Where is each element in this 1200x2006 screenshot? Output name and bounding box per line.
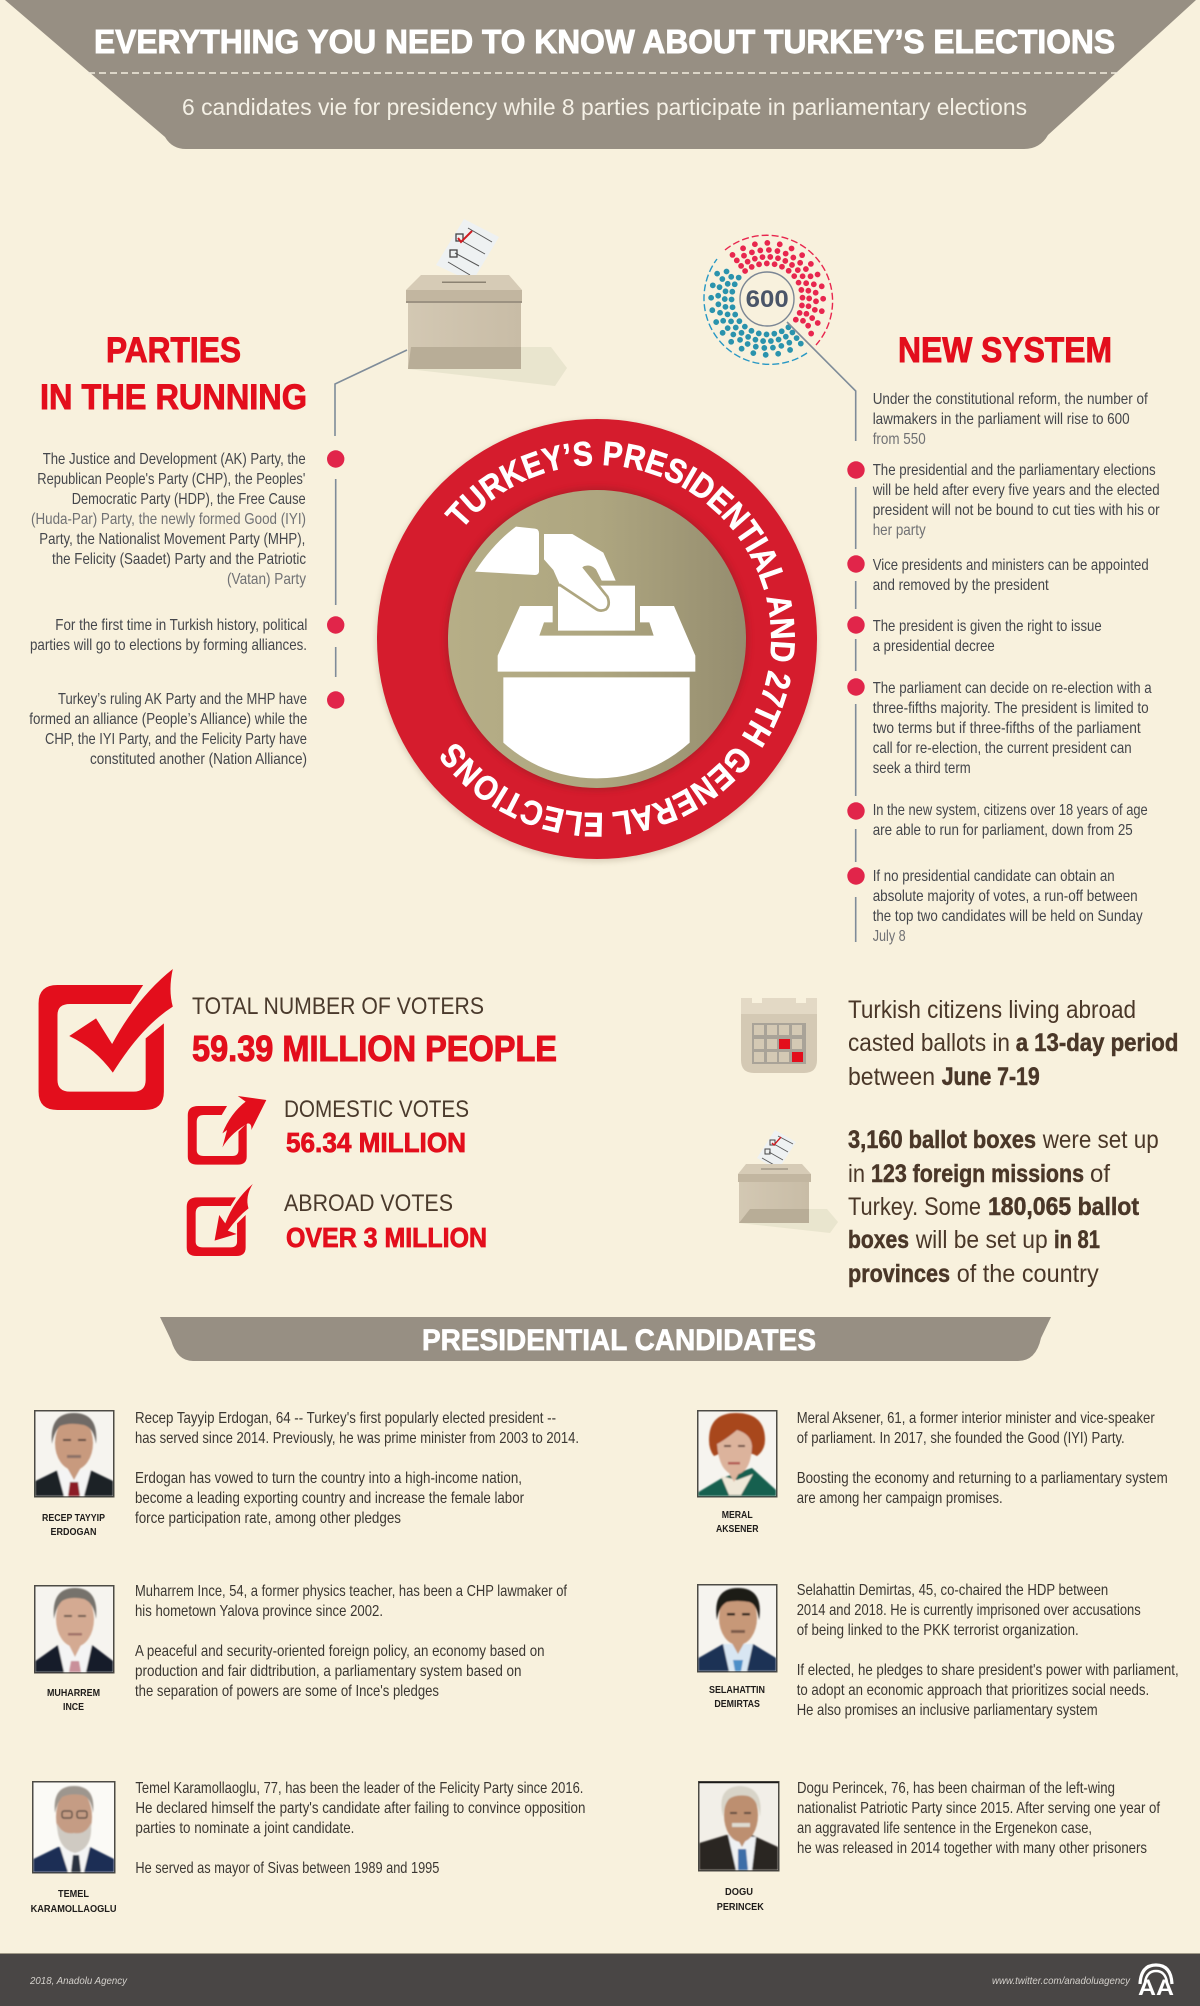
name: Demirtas: SELAHATTIN xyxy=(709,1684,765,1696)
text: Ince bio xyxy=(135,1583,567,1700)
text: run-off: July 8 xyxy=(873,928,906,945)
text: elections every five years: her party xyxy=(873,522,926,539)
portrait: Karamollaoglu xyxy=(33,1782,115,1873)
name: Erdogan: RECEP TAYYIP xyxy=(42,1512,105,1524)
number: abroad votes: OVER 3 MILLION xyxy=(286,1222,487,1253)
heading: parties: PARTIES xyxy=(106,331,241,370)
candidate: Ince xyxy=(35,1583,567,1713)
ring text: TURKEY’S PRESIDENTIAL AND 27TH GENERAL ELECTIONS xyxy=(440,441,795,837)
text: lawmakers xyxy=(873,391,1148,448)
text: Perincek bio: an aggravated life sentence in the Ergenekon case, xyxy=(797,1820,1092,1837)
name: Karamollaoglu xyxy=(31,1888,117,1915)
text: Ince bio: A peaceful and security-oriented foreign policy, an economy based on xyxy=(135,1643,544,1660)
text: ballot box counts: in 81 xyxy=(1054,1226,1100,1254)
icon: calendar xyxy=(741,998,817,1073)
text: ballot box counts: provinces xyxy=(848,1260,950,1288)
text: party list: Democratic Party (HDP), the Free Cause xyxy=(72,491,306,508)
label: total voters: TOTAL NUMBER OF VOTERS xyxy=(192,993,484,1020)
text: lawmakers: from 550 xyxy=(873,431,926,448)
text: party list: (Huda-Par) Party, the newly formed Good (IYI) xyxy=(31,511,306,528)
footer url: www.twitter.com/anadoluagency xyxy=(992,1975,1131,1987)
panel: abroad voting period xyxy=(738,996,1178,1288)
text: Perincek bio: Dogu Perincek, 76, has been chairman of the left-wing xyxy=(797,1780,1115,1797)
text: Erdogan bio: has served since 2014. Previously, he was prime minister from 2003 to 2014. xyxy=(135,1430,579,1447)
text: age limit: In the new system, citizens over 18 years of age xyxy=(873,802,1148,819)
text: vice presidents: and removed by the president xyxy=(873,577,1049,594)
number: total voters: 59.39 MILLION PEOPLE xyxy=(192,1028,557,1069)
label: abroad votes: ABROAD VOTES xyxy=(284,1190,453,1217)
text: age limit: are able to run for parliament, down from 25 xyxy=(873,822,1133,839)
text: Aksener bio xyxy=(797,1410,1168,1507)
candidate: Erdogan xyxy=(35,1410,579,1538)
icon: AA logo: AA xyxy=(1138,1975,1174,2000)
text: ballot box counts xyxy=(848,1126,1159,1288)
portrait: Erdogan xyxy=(35,1411,114,1497)
name: Demirtas xyxy=(709,1684,765,1710)
section banner: presidential candidates xyxy=(160,1317,1051,1361)
text: 13-day period: between xyxy=(848,1063,935,1091)
panel: new system xyxy=(787,322,1160,945)
text: ballot box counts: 180,065 ballot xyxy=(988,1193,1140,1221)
text: run-off: absolute majority of votes, a run-off between xyxy=(873,888,1138,905)
text: age limit xyxy=(873,802,1148,839)
text: re-election: three-fifths majority. The president is limited to xyxy=(873,700,1149,717)
text: Ince bio: production and fair didtribution, a parliamentary system based on xyxy=(135,1663,522,1680)
text: alliances first xyxy=(30,617,307,654)
name: Perincek: PERINCEK xyxy=(717,1901,764,1913)
icon: large checkbox xyxy=(39,969,173,1110)
text: Demirtas bio: Selahattin Demirtas, 45, co-chaired the HDP between xyxy=(797,1582,1108,1599)
text: ballot box counts: 123 foreign missions xyxy=(871,1160,1084,1188)
text: 13-day period xyxy=(848,996,1178,1091)
text: run-off xyxy=(873,868,1143,945)
portrait: Perincek xyxy=(699,1782,779,1871)
candidate: Karamollaoglu xyxy=(31,1780,585,1915)
text: re-election: call for re-election, the current president can xyxy=(873,740,1132,757)
text: Karamollaoglu bio: parties to nominate a joint candidate. xyxy=(135,1820,354,1837)
candidate: Aksener xyxy=(698,1410,1168,1535)
timeline connector xyxy=(787,322,865,942)
panel: parties in the running xyxy=(29,331,407,768)
text: ballot box counts: in xyxy=(848,1160,865,1188)
text: Ince bio: the separation of powers are some of Ince's pledges xyxy=(135,1683,439,1700)
candidate: Perincek xyxy=(699,1780,1160,1913)
text: Demirtas bio: of being linked to the PKK terrorist organization. xyxy=(797,1622,1079,1639)
text: Karamollaoglu bio: He served as mayor of Sivas between 1989 and 1995 xyxy=(135,1860,439,1877)
heading: in the running: IN THE RUNNING xyxy=(40,378,307,417)
name: Karamollaoglu: TEMEL xyxy=(58,1888,89,1900)
panel: voter statistics xyxy=(39,969,557,1256)
subtitle: 6 candidates vie for presidency while 8 parties participate in parliamentary elections xyxy=(182,94,1027,120)
text: alliance members xyxy=(29,691,307,768)
text: lawmakers: lawmakers in the parliament will rise to 600 xyxy=(873,411,1130,428)
icon: small ballot box xyxy=(738,1130,838,1233)
central emblem xyxy=(374,418,820,864)
name: Karamollaoglu: KARAMOLLAOGLU xyxy=(31,1903,117,1915)
text: ballot box counts: boxes xyxy=(848,1226,909,1254)
text: Ince bio: his hometown Yalova province since 2002. xyxy=(135,1603,383,1620)
name: Demirtas: DEMIRTAS xyxy=(714,1698,760,1710)
text: Ince bio: Muharrem Ince, 54, a former physics teacher, has been a CHP lawmaker of xyxy=(135,1583,567,1600)
name: Ince xyxy=(47,1687,100,1713)
text: Demirtas bio xyxy=(797,1582,1179,1719)
text: Demirtas bio: He also promises an inclusive parliamentary system xyxy=(797,1702,1098,1719)
text: Perincek bio xyxy=(797,1780,1160,1857)
icon: hand casting ballot xyxy=(475,527,695,778)
text: ballot box counts: Turkey. Some xyxy=(848,1193,981,1221)
heading: new system: NEW SYSTEM xyxy=(898,331,1112,370)
title: EVERYTHING YOU NEED TO KNOW ABOUT TURKEY’S ELECTIONS xyxy=(94,23,1115,60)
text: alliance members: Turkey’s ruling AK Party and the MHP have xyxy=(58,691,307,708)
name: Aksener: MERAL xyxy=(722,1509,753,1521)
text: run-off: If no presidential candidate can obtain an xyxy=(873,868,1115,885)
text: 13-day period: a 13-day period xyxy=(1016,1029,1178,1057)
text: ballot box counts: will be set up xyxy=(915,1226,1048,1254)
icon: AA logo xyxy=(1138,1965,1174,2000)
text: decree: a presidential decree xyxy=(873,638,995,655)
text: elections every five years xyxy=(872,462,1160,539)
footer xyxy=(0,1953,1200,2006)
text: re-election: The parliament can decide on re-election with a xyxy=(873,680,1152,697)
footer credit: 2018, Anadolu Agency xyxy=(29,1975,128,1987)
text: Aksener bio: of parliament. In 2017, she founded the Good (IYI) Party. xyxy=(797,1430,1125,1447)
label: domestic votes: DOMESTIC VOTES xyxy=(284,1096,469,1123)
name: Erdogan: ERDOGAN xyxy=(50,1526,96,1538)
candidate: Demirtas xyxy=(698,1582,1179,1719)
text: ballot box counts: were set up xyxy=(1042,1126,1159,1154)
text: party list: Party, the Nationalist Movement Party (MHP), xyxy=(39,531,305,548)
text: decree xyxy=(873,618,1102,655)
header banner xyxy=(5,0,1196,149)
text: vice presidents xyxy=(873,557,1149,594)
text: party list: the Felicity (Saadet) Party and the Patriotic xyxy=(52,551,306,568)
icon: ballot box xyxy=(406,219,567,386)
text: Aksener bio: are among her campaign promises. xyxy=(797,1490,1003,1507)
text: 13-day period: Turkish citizens living abroad xyxy=(848,996,1136,1024)
text: elections every five years: president will not be bound to cut ties with his or xyxy=(873,502,1160,519)
text: re-election xyxy=(873,680,1152,777)
text: ballot box counts: of xyxy=(1090,1160,1110,1188)
text: party list: The Justice and Development (AK) Party, the xyxy=(43,451,306,468)
name: Perincek xyxy=(717,1886,764,1913)
text: Erdogan bio xyxy=(135,1410,579,1527)
text: alliances first: parties will go to elections by forming alliances. xyxy=(30,637,307,654)
text: party list: (Vatan) Party xyxy=(227,571,306,588)
portrait: Ince xyxy=(35,1586,114,1673)
number: domestic votes: 56.34 MILLION xyxy=(286,1127,466,1158)
icon: domestic checkbox arrow xyxy=(188,1096,266,1165)
text: Erdogan bio: Recep Tayyip Erdogan, 64 -- Turkey's first popularly elected president -- xyxy=(135,1410,556,1427)
text: re-election: seek a third term xyxy=(873,760,971,777)
timeline connector xyxy=(327,350,407,709)
text: Karamollaoglu bio: He declared himself the party's candidate after failing to convince opposition xyxy=(135,1800,585,1817)
icon: parliament seats 600: 600 xyxy=(746,286,789,313)
portrait: Demirtas xyxy=(698,1585,777,1672)
text: run-off: the top two candidates will be held on Sunday xyxy=(873,908,1143,925)
name: Erdogan xyxy=(42,1512,105,1538)
icon: parliament seats 600 xyxy=(704,235,833,364)
section banner: presidential candidates: PRESIDENTIAL CANDIDATES xyxy=(422,1324,816,1357)
text: decree: The president is given the right to issue xyxy=(873,618,1102,635)
text: alliance members: constituted another (Nation Alliance) xyxy=(90,751,307,768)
text: vice presidents: Vice presidents and ministers can be appointed xyxy=(873,557,1149,574)
text: 13-day period: June 7-19 xyxy=(942,1063,1040,1091)
text: Erdogan bio: force participation rate, among other pledges xyxy=(135,1510,401,1527)
text: elections every five years: The presidential and the parliamentary elections xyxy=(873,462,1156,479)
name: Ince: INCE xyxy=(63,1701,84,1713)
text: ballot box counts: of the country xyxy=(957,1260,1099,1288)
text: alliances first: For the first time in Turkish history, political xyxy=(55,617,307,634)
text: party list xyxy=(31,451,306,588)
text: Karamollaoglu bio: Temel Karamollaoglu, 77, has been the leader of the Felicity Party since 2016. xyxy=(135,1780,583,1797)
name: Aksener xyxy=(716,1509,759,1535)
text: party list: Republican People's Party (CHP), the Peoples' xyxy=(37,471,305,488)
text: Erdogan bio: Erdogan has vowed to turn the country into a high-income nation, xyxy=(135,1470,522,1487)
text: alliance members: CHP, the IYI Party, and the Felicity Party have xyxy=(45,731,307,748)
text: alliance members: formed an alliance (People’s Alliance) while the xyxy=(29,711,307,728)
text: lawmakers: Under the constitutional reform, the number of xyxy=(873,391,1148,408)
text: Erdogan bio: become a leading exporting country and increase the female labor xyxy=(135,1490,525,1507)
text: re-election: two terms but if three-fifths of the parliament xyxy=(873,720,1141,737)
name: Ince: MUHARREM xyxy=(47,1687,100,1699)
icon: abroad checkbox arrow xyxy=(187,1184,253,1256)
name: Aksener: AKSENER xyxy=(716,1523,759,1535)
name: Perincek: DOGU xyxy=(725,1886,753,1898)
text: Karamollaoglu bio xyxy=(135,1780,585,1877)
text: 13-day period: casted ballots in xyxy=(848,1029,1010,1057)
portrait: Aksener xyxy=(698,1411,777,1497)
text: ballot box counts: 3,160 ballot boxes xyxy=(848,1126,1036,1154)
